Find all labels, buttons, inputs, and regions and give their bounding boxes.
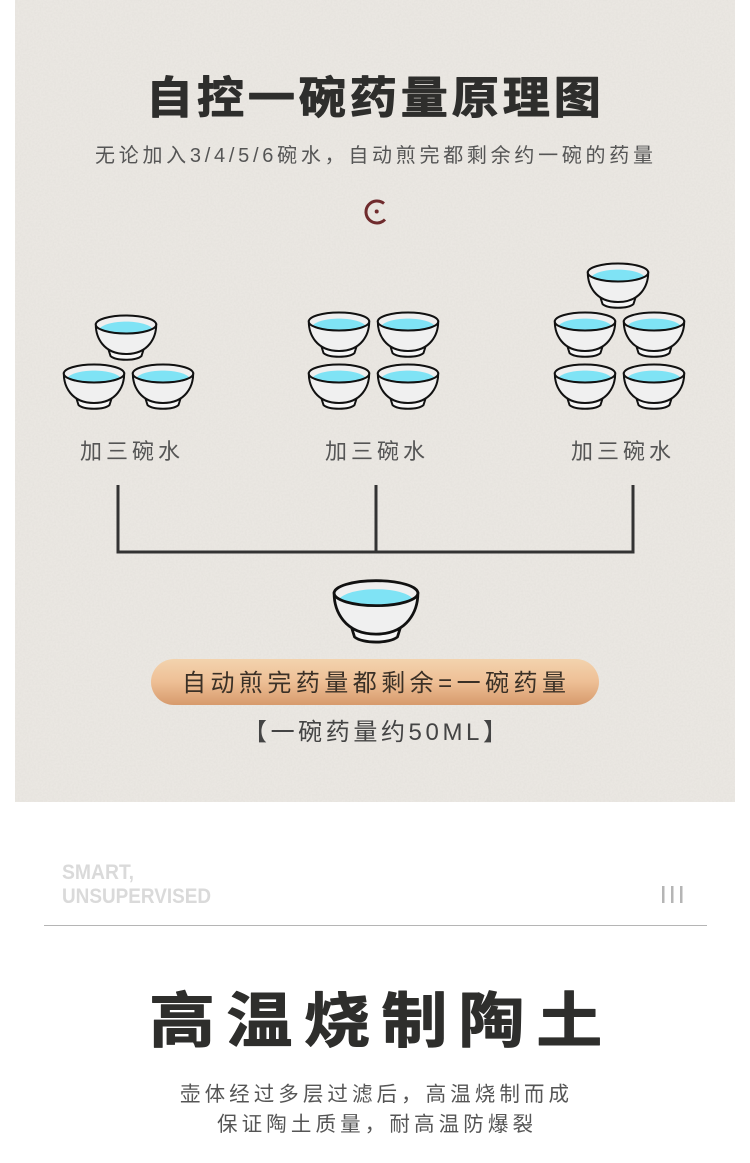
bowl group: three bowls: [64, 316, 193, 409]
section marker: three bars: [662, 886, 682, 903]
connector bracket: [118, 485, 633, 552]
description text: [180, 1083, 569, 1136]
heading: high temperature clay: 高温烧制陶土: [149, 989, 602, 1055]
subtitle: 无论加入3/4/5/6碗水，自动煎完都剩余约一碗的药量: [95, 144, 653, 167]
english tagline: SMART,: [62, 861, 134, 884]
label: left bowls: 加三碗水: [80, 439, 180, 464]
result pill: [151, 659, 599, 705]
note: bowl volume: 【一碗药量约50ML】: [243, 719, 507, 746]
icon: result bowl: [334, 581, 418, 642]
title: 自控一碗药量原理图: [146, 73, 601, 123]
description text: 保证陶土质量，耐高温防爆裂: [217, 1113, 533, 1136]
english tagline: [62, 861, 211, 908]
icon: circled dot logo: [366, 201, 385, 223]
bowl group: five bowls: [555, 264, 684, 409]
description text: 壶体经过多层过滤后，高温烧制而成: [180, 1083, 569, 1106]
panel: principle diagram background: [15, 0, 735, 802]
label: middle bowls: 加三碗水: [325, 439, 425, 464]
english tagline: UNSUPERVISED: [62, 885, 211, 908]
result pill: 自动煎完药量都剩余=一碗药量: [182, 670, 566, 697]
label: right bowls: 加三碗水: [571, 439, 671, 464]
bowl group: four bowls: [309, 312, 438, 409]
